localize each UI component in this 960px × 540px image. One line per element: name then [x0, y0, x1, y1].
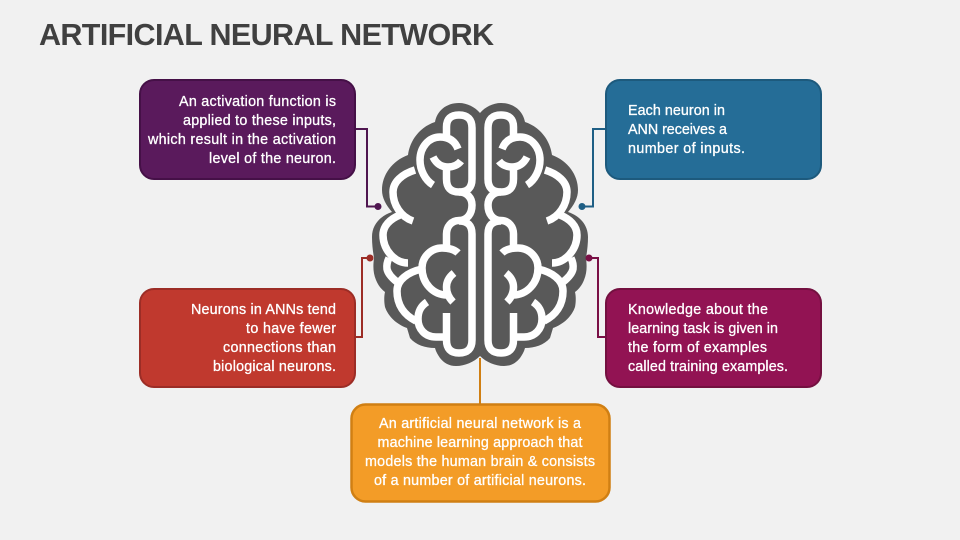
brain icon — [372, 103, 588, 366]
panel: inputs: number of inputs. — [628, 141, 745, 157]
connector: red — [355, 256, 372, 337]
panel: fewer connections: to have fewer — [246, 321, 336, 337]
panel: definition: An artificial neural network is a — [379, 416, 581, 432]
panel: inputs — [606, 80, 821, 179]
panel: inputs: ANN receives a — [628, 122, 727, 138]
panel: training examples: learning task is given in — [628, 321, 778, 337]
panel: training examples — [606, 289, 821, 387]
panel: training examples: the form of examples — [628, 340, 767, 356]
panel: activation function: applied to these inputs, — [183, 113, 336, 129]
title: ARTIFICIAL NEURAL NETWORK — [39, 18, 494, 52]
brain folds right — [488, 115, 577, 353]
panel: fewer connections: Neurons in ANNs tend — [191, 302, 336, 318]
connector: blue — [580, 129, 606, 209]
panel: activation function: which result in the activation — [147, 132, 336, 148]
panel: fewer connections: biological neurons. — [213, 359, 336, 375]
panel: definition: machine learning approach that — [378, 435, 583, 451]
brain silhouette — [372, 103, 588, 366]
brain folds left — [383, 115, 472, 353]
panel: activation function — [140, 80, 355, 179]
panel: activation function: An activation function is — [179, 94, 336, 110]
panel: fewer connections — [140, 289, 355, 387]
panel: definition: models the human brain & consists — [365, 454, 595, 470]
panel: definition — [352, 404, 610, 502]
panel: fewer connections: connections than — [223, 340, 336, 356]
panel: activation function: level of the neuron. — [209, 151, 336, 167]
panel: training examples: Knowledge about the — [628, 302, 768, 318]
connector: magenta — [586, 256, 606, 337]
panel: definition: of a number of artificial neurons. — [374, 473, 586, 489]
panel: training examples: called training examples. — [628, 359, 788, 375]
panel: inputs: Each neuron in — [628, 103, 725, 119]
connector: orange — [479, 358, 481, 404]
connector: purple — [355, 129, 380, 209]
